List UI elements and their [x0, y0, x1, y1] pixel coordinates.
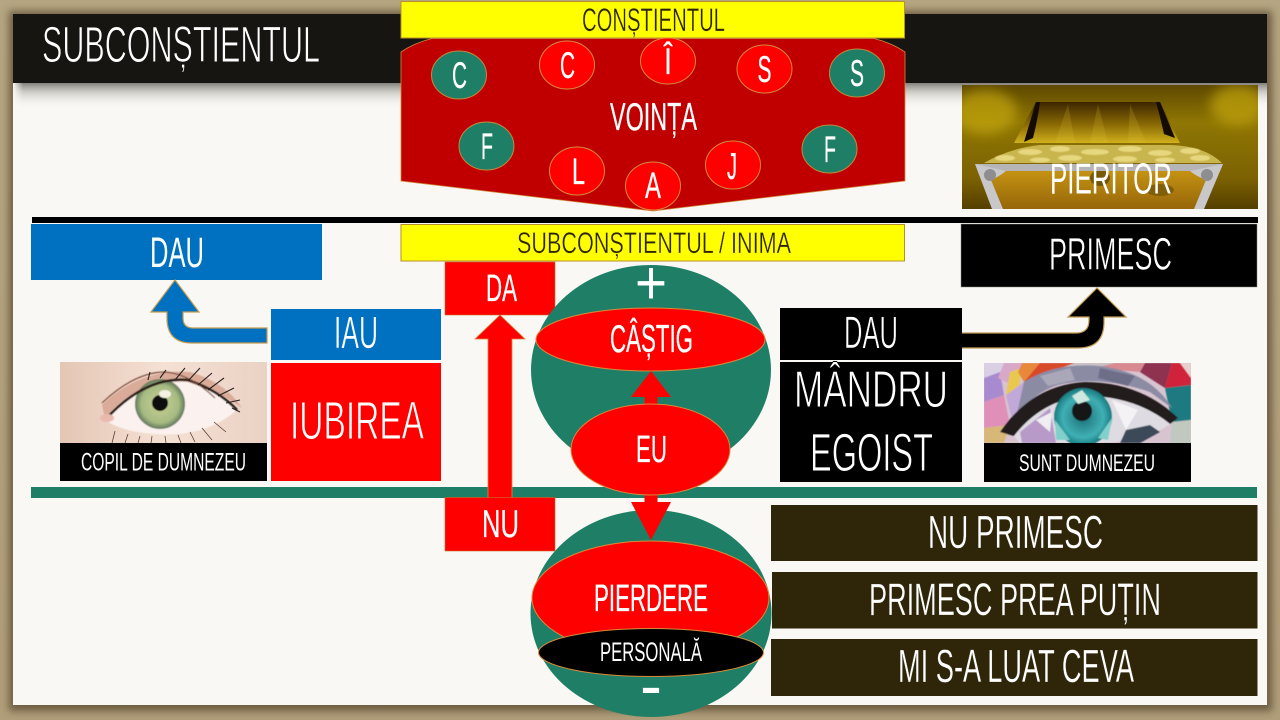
divider: black line — [32, 217, 1258, 223]
top banner: conștientul: CONȘTIENTUL — [582, 2, 725, 38]
virtue F green left: F — [481, 126, 493, 167]
ellipse: pierdere: PIERDERE — [594, 578, 708, 620]
ellipse: eu — [571, 404, 730, 495]
box: primesc prea puțin — [772, 572, 1258, 628]
box: dau blue: DAU — [150, 229, 204, 277]
virtue L red: L — [572, 151, 585, 192]
box: nu primesc — [771, 505, 1258, 561]
box: dau black — [780, 307, 962, 360]
box: mândru egoist: MÂNDRU — [794, 361, 948, 419]
caption: copil de dumnezeu: COPIL DE DUMNEZEU — [81, 448, 246, 476]
virtue S red: S — [758, 49, 772, 90]
virtue J red — [706, 141, 760, 189]
panel: voința shield — [401, 38, 905, 211]
picture: colourful eye with caption — [984, 363, 1191, 482]
box: iubirea — [271, 363, 441, 481]
virtue Î red — [640, 38, 696, 84]
box: dau blue — [31, 224, 322, 280]
virtue A red: A — [645, 165, 661, 206]
virtue A red — [626, 162, 680, 210]
circle: lower green loss sphere — [530, 510, 772, 720]
top banner: conștientul — [401, 2, 904, 38]
virtue S green: S — [850, 53, 864, 94]
divider: green line — [31, 487, 1257, 498]
ellipse: personală — [538, 628, 764, 676]
title bar — [13, 14, 1267, 83]
virtue F green left — [459, 122, 514, 170]
box: nu primesc: NU PRIMESC — [928, 506, 1103, 558]
virtue F green right: F — [824, 129, 836, 170]
box: da — [445, 262, 555, 315]
virtue C green: C — [452, 55, 467, 96]
box: mândru egoist — [780, 361, 962, 483]
box: iau: IAU — [334, 307, 378, 358]
ellipse: câștig: CÂȘTIG — [610, 318, 693, 361]
virtue Î red: Î — [663, 41, 673, 82]
box: primesc black: PRIMESC — [1049, 228, 1172, 280]
virtue L red — [550, 147, 604, 195]
banner: subconștientul / inima — [401, 224, 904, 261]
ellipse: personală: PERSONALĂ — [600, 637, 702, 667]
arrow: black bent up — [960, 288, 1126, 348]
box: nu — [445, 498, 555, 551]
virtue C red: C — [560, 45, 575, 86]
box: primesc black — [961, 224, 1257, 287]
virtue S green — [830, 49, 884, 97]
arrow: red up from nu to da — [475, 315, 525, 500]
circle: upper green gain sphere — [531, 249, 771, 475]
picture: treasure chest — [953, 85, 1266, 209]
ellipse: câștig — [536, 308, 765, 371]
box: mi s-a luat ceva — [771, 639, 1258, 696]
ellipse: pierdere — [532, 541, 769, 655]
picture: green eye with caption — [60, 362, 267, 481]
banner: subconștientul / inima: SUBCONȘTIENTUL / INIMA — [517, 227, 791, 260]
title: SUBCONȘTIENTUL — [42, 16, 320, 73]
virtue C red — [540, 41, 594, 89]
minus sign: - — [640, 648, 662, 720]
label: pieritor: PIERITOR — [1050, 154, 1172, 204]
virtue C green — [432, 51, 486, 99]
box: iau — [271, 307, 441, 360]
heading: voința: VOINȚA — [610, 96, 697, 139]
caption: sunt dumnezeu: SUNT DUMNEZEU — [1019, 450, 1155, 477]
box: iubirea: IUBIREA — [290, 391, 424, 451]
box: mândru egoist: EGOIST — [810, 423, 933, 483]
box: da: DA — [486, 268, 517, 310]
ellipse: eu: EU — [636, 429, 667, 471]
box: dau black: DAU — [844, 307, 898, 358]
virtue J red: J — [727, 146, 737, 187]
arrow: red double from eu to gain and loss — [631, 371, 671, 540]
box: nu: NU — [482, 503, 519, 546]
plus sign: + — [635, 249, 667, 318]
arrow: blue bent up — [151, 280, 267, 343]
virtue S red — [737, 45, 792, 93]
virtue F green right — [802, 125, 857, 173]
